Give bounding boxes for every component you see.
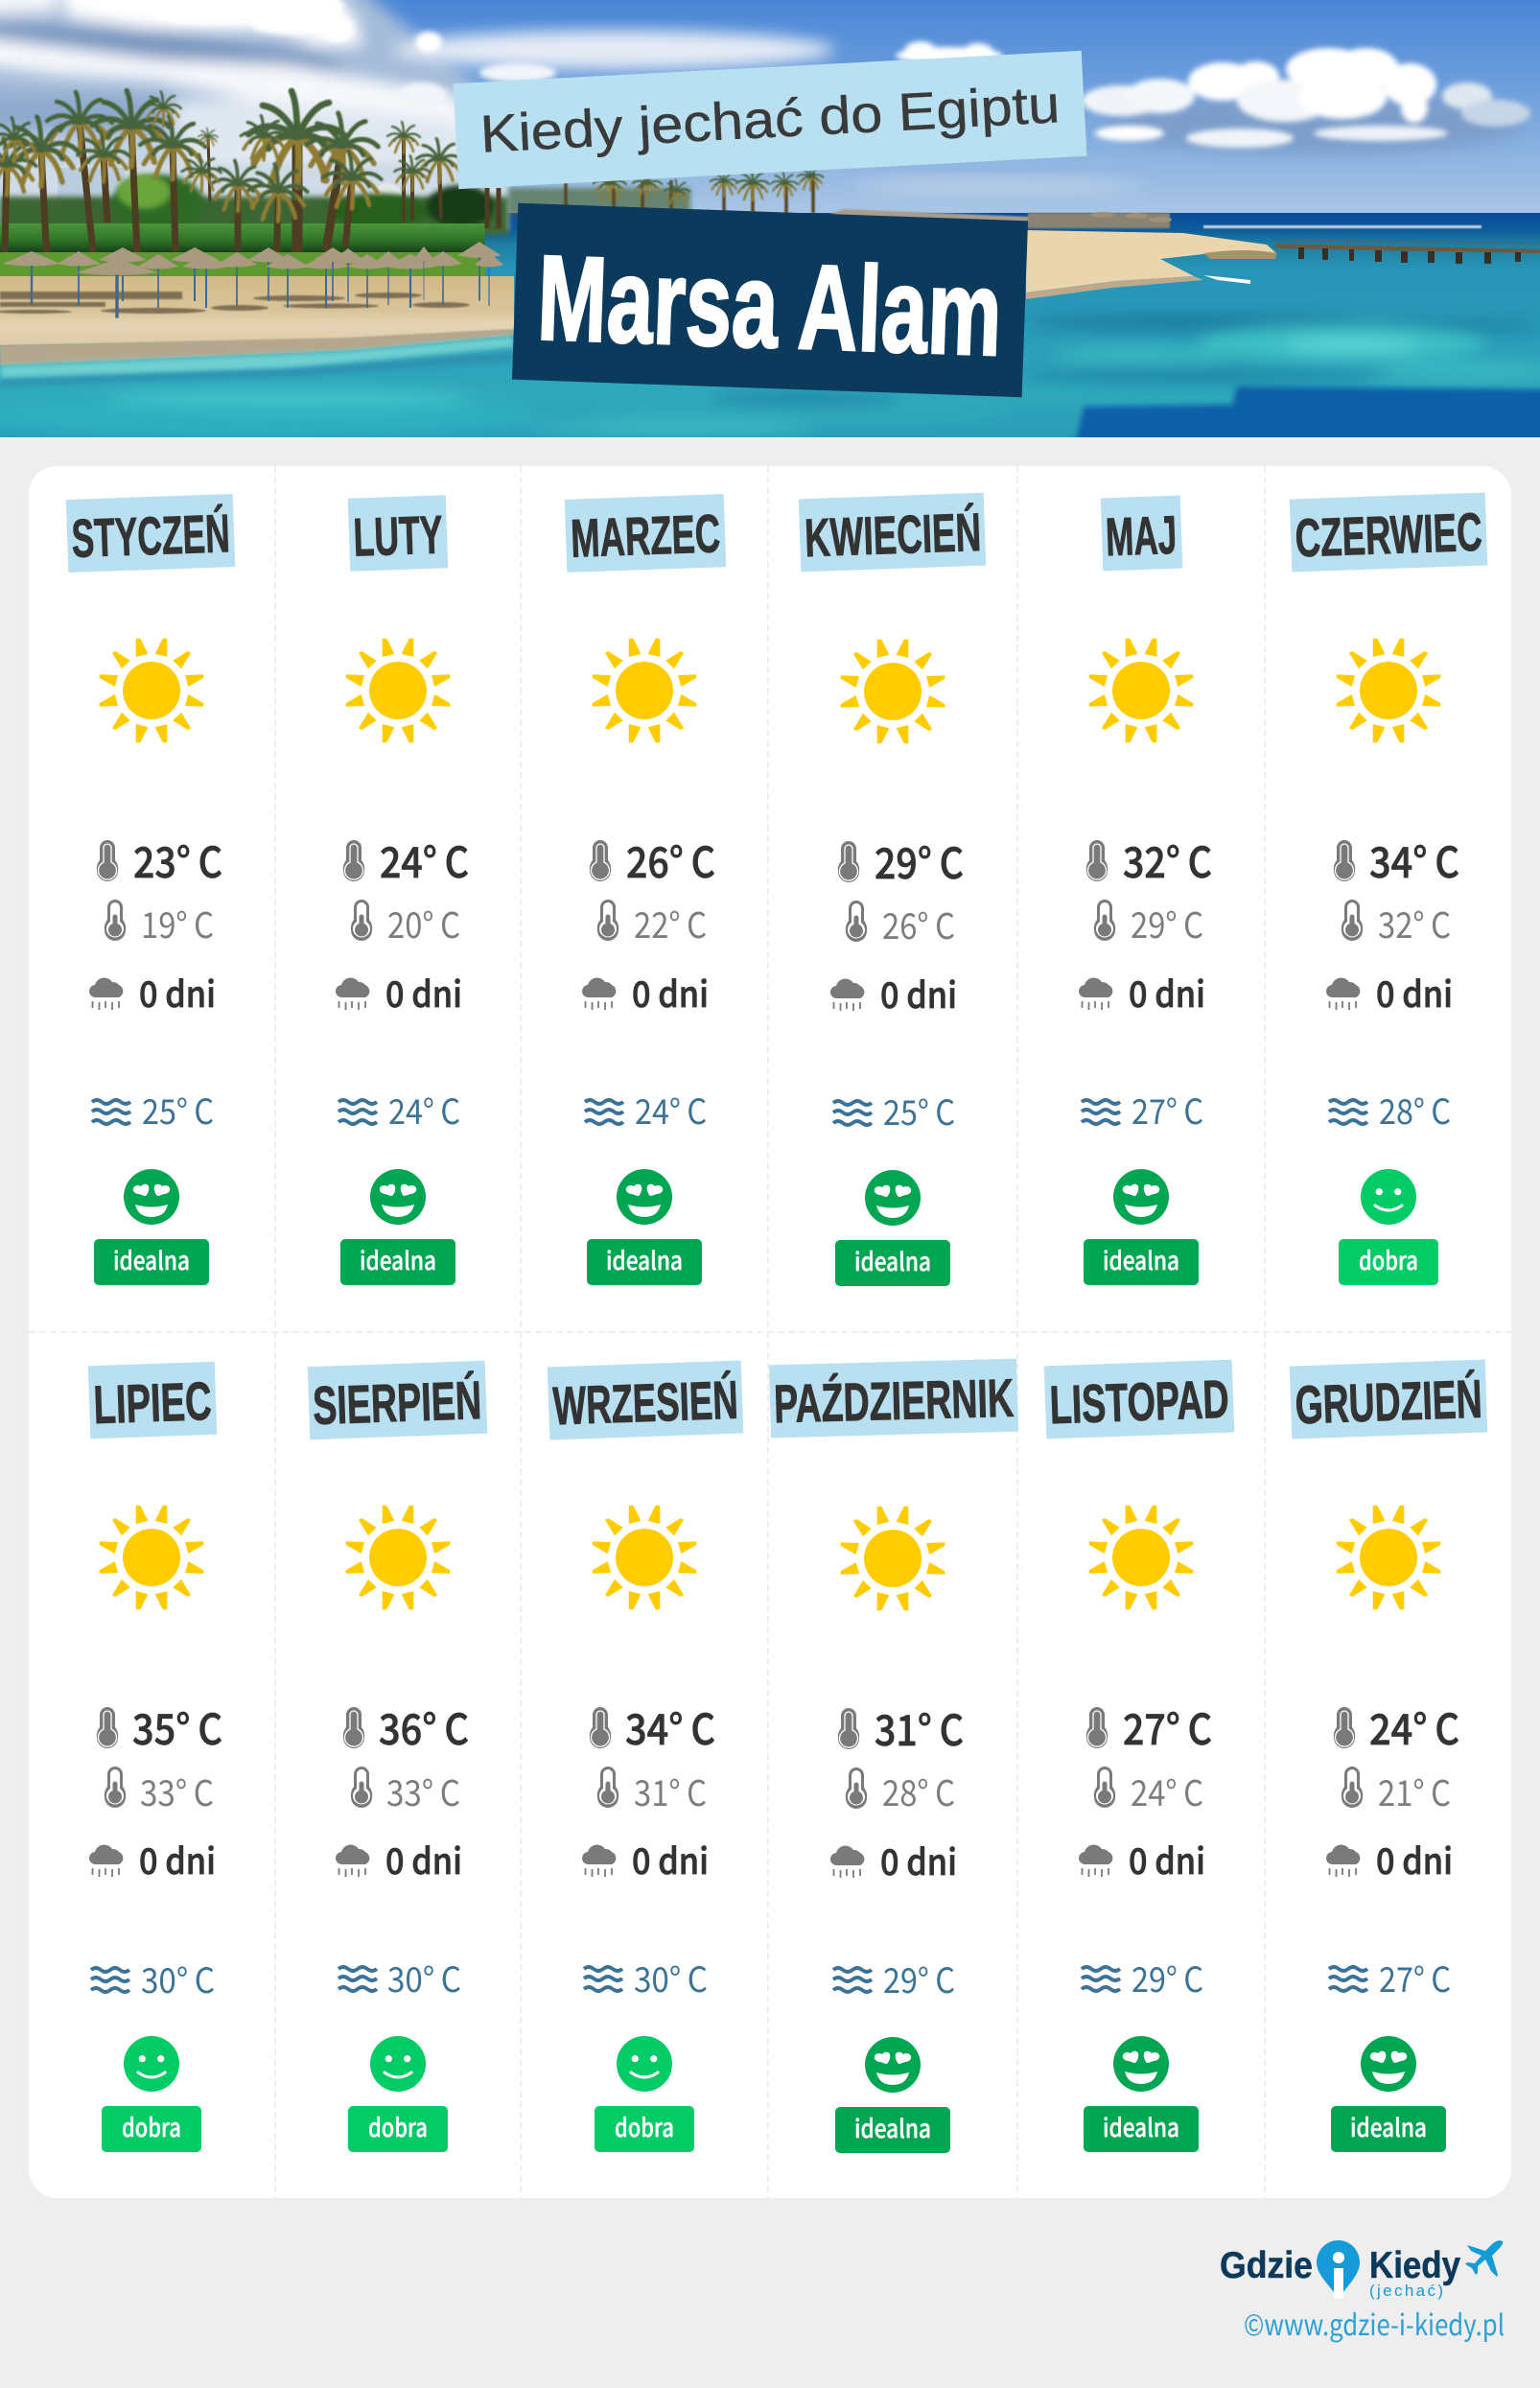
sea temperature: 27° C bbox=[1132, 1085, 1203, 1135]
rating: dobra: dobra bbox=[615, 2109, 674, 2144]
sea temperature: 30° C bbox=[141, 1954, 215, 2003]
rainy days bbox=[336, 966, 462, 1018]
icon: sun bbox=[346, 639, 450, 742]
rating: dobra bbox=[595, 2036, 694, 2152]
sea temperature: 27° C bbox=[1379, 1953, 1451, 2002]
day temperature: 34° C bbox=[1369, 829, 1459, 890]
month: wrzesień bbox=[548, 1360, 743, 2152]
rainy days bbox=[89, 966, 216, 1018]
icon: sun bbox=[346, 1506, 450, 1609]
day temperature bbox=[97, 1696, 222, 1757]
day temperature: 35° C bbox=[132, 1696, 222, 1757]
sea temperature: 29° C bbox=[1132, 1953, 1203, 2002]
website credit: ©www.gdzie-i-kiedy.pl bbox=[1244, 2302, 1505, 2344]
night temperature bbox=[1342, 897, 1451, 948]
day temperature bbox=[97, 829, 222, 890]
month: maj bbox=[1079, 496, 1212, 1285]
rating: dobra bbox=[348, 2036, 448, 2152]
sea temperature bbox=[1082, 1085, 1203, 1135]
photo: distant palms between banners bbox=[508, 165, 1031, 222]
rainy days: 0 dni bbox=[1376, 966, 1453, 1018]
rainy days bbox=[1079, 1833, 1205, 1885]
rating: idealna: idealna bbox=[360, 1242, 436, 1277]
photo: clouds bbox=[0, 0, 1530, 221]
icon: sun bbox=[593, 639, 696, 742]
night temperature: 33° C bbox=[140, 1765, 214, 1816]
heading: WRZESIEŃ bbox=[552, 1370, 739, 1436]
sea temperature: 30° C bbox=[634, 1953, 708, 2002]
sea temperature bbox=[338, 1085, 460, 1135]
sea temperature bbox=[585, 1085, 707, 1135]
rainy days: 0 dni bbox=[1129, 1833, 1205, 1885]
rating: idealna bbox=[1084, 1169, 1199, 1285]
night temperature bbox=[105, 897, 214, 948]
heading bbox=[799, 493, 986, 572]
logo: Gdzie i Kiedy (jechać) bbox=[1220, 2240, 1503, 2300]
heading: MAJ bbox=[1105, 504, 1178, 567]
heading bbox=[1044, 1360, 1234, 1439]
photo: sea shading bbox=[0, 225, 1540, 451]
rainy days bbox=[582, 1833, 709, 1885]
day temperature bbox=[590, 1696, 715, 1757]
rating: idealna: idealna bbox=[1103, 2109, 1179, 2144]
rainy days: 0 dni bbox=[880, 1834, 957, 1885]
sea temperature bbox=[92, 1085, 214, 1135]
rainy days: 0 dni bbox=[385, 1833, 462, 1885]
icon: sun bbox=[841, 640, 945, 743]
rating: dobra bbox=[1339, 1169, 1438, 1285]
icon: sun bbox=[1337, 1506, 1440, 1609]
rating: idealna bbox=[1331, 2036, 1446, 2152]
rainy days bbox=[336, 1833, 462, 1885]
night temperature bbox=[597, 1765, 707, 1816]
icon: map pin with letter i bbox=[1317, 2240, 1360, 2299]
day temperature bbox=[590, 829, 715, 890]
heading bbox=[1290, 1359, 1487, 1440]
sea temperature bbox=[338, 1953, 461, 2002]
heading: LUTY bbox=[353, 503, 444, 568]
rainy days bbox=[1079, 966, 1205, 1018]
icon: sun bbox=[100, 1506, 203, 1609]
icon: sun bbox=[100, 639, 203, 742]
rainy days: 0 dni bbox=[385, 966, 462, 1018]
sea temperature bbox=[833, 1086, 955, 1135]
night temperature: 24° C bbox=[1131, 1765, 1203, 1816]
rating: idealna bbox=[94, 1169, 209, 1285]
icon: sun bbox=[1337, 639, 1440, 742]
icon: sun bbox=[593, 1506, 696, 1609]
logo: Gdzie i Kiedy (jechać): (jechać) bbox=[1369, 2282, 1443, 2300]
heading: PAŹDZIERNIK bbox=[773, 1368, 1015, 1434]
night temperature: 29° C bbox=[1131, 897, 1203, 948]
rating: idealna bbox=[587, 1169, 702, 1285]
month: styczeń bbox=[66, 494, 235, 1285]
night temperature: 28° C bbox=[882, 1765, 955, 1816]
day temperature: 26° C bbox=[626, 829, 715, 890]
rainy days bbox=[582, 966, 709, 1018]
night temperature: 32° C bbox=[1378, 897, 1451, 948]
month: sierpień bbox=[308, 1361, 487, 2152]
heading bbox=[565, 494, 726, 573]
night temperature bbox=[597, 897, 707, 948]
day temperature: 24° C bbox=[380, 829, 469, 890]
month: marzec bbox=[565, 494, 726, 1285]
icon: sun bbox=[841, 1507, 945, 1610]
night temperature bbox=[105, 1765, 214, 1816]
rainy days bbox=[830, 1834, 957, 1885]
rating: idealna: idealna bbox=[1103, 1242, 1179, 1277]
rainy days bbox=[89, 1833, 216, 1885]
photo: foliage bbox=[0, 91, 1540, 451]
day temperature bbox=[343, 829, 469, 890]
rating: dobra: dobra bbox=[122, 2109, 181, 2144]
night temperature: 20° C bbox=[387, 897, 460, 948]
night temperature bbox=[846, 1765, 955, 1816]
month: luty bbox=[336, 495, 469, 1285]
icon: sun bbox=[1089, 639, 1193, 742]
rainy days: 0 dni bbox=[632, 966, 709, 1018]
heading bbox=[308, 1361, 487, 1440]
day temperature bbox=[838, 830, 964, 891]
logo: Gdzie i Kiedy (jechać): Gdzie bbox=[1220, 2245, 1313, 2286]
night temperature: 22° C bbox=[634, 897, 707, 948]
heading bbox=[348, 495, 448, 572]
sea temperature: 25° C bbox=[883, 1086, 955, 1135]
rating: idealna: idealna bbox=[854, 1243, 931, 1278]
icon: sun bbox=[1089, 1506, 1193, 1609]
sea temperature: 24° C bbox=[388, 1085, 460, 1135]
day temperature bbox=[1086, 1696, 1212, 1757]
day temperature: 29° C bbox=[875, 830, 964, 891]
sea temperature: 25° C bbox=[142, 1085, 214, 1135]
night temperature bbox=[1094, 897, 1203, 948]
night temperature: 19° C bbox=[141, 897, 214, 948]
rainy days bbox=[830, 967, 957, 1018]
rainy days: 0 dni bbox=[880, 967, 957, 1018]
day temperature bbox=[838, 1697, 964, 1758]
sea temperature bbox=[91, 1954, 215, 2003]
sea temperature bbox=[584, 1953, 708, 2002]
title banner: Marsa Alam bbox=[512, 203, 1028, 397]
rating: dobra bbox=[102, 2036, 201, 2152]
month: grudzień bbox=[1290, 1359, 1487, 2152]
night temperature bbox=[1342, 1765, 1451, 1816]
night temperature: 26° C bbox=[882, 898, 955, 949]
rating: idealna: idealna bbox=[113, 1242, 190, 1277]
day temperature: 27° C bbox=[1123, 1696, 1212, 1757]
rainy days: 0 dni bbox=[1129, 966, 1205, 1018]
sea temperature: 24° C bbox=[635, 1085, 707, 1135]
rainy days bbox=[1326, 1833, 1453, 1885]
rating: idealna bbox=[1084, 2036, 1199, 2152]
heading bbox=[66, 494, 235, 573]
night temperature: 21° C bbox=[1378, 1765, 1451, 1816]
heading: STYCZEŃ bbox=[71, 503, 231, 569]
heading: LISTOPAD bbox=[1049, 1369, 1230, 1435]
heading bbox=[1101, 496, 1182, 571]
rainy days: 0 dni bbox=[139, 966, 216, 1018]
rainy days: 0 dni bbox=[1376, 1833, 1453, 1885]
rating: idealna: idealna bbox=[1350, 2109, 1427, 2144]
rating: idealna bbox=[835, 1170, 950, 1286]
night temperature bbox=[351, 1765, 460, 1816]
sea temperature bbox=[1329, 1953, 1451, 2002]
day temperature bbox=[343, 1696, 469, 1757]
rating: idealna: idealna bbox=[854, 2110, 931, 2145]
sea temperature bbox=[1082, 1953, 1203, 2002]
heading: LIPIEC bbox=[93, 1370, 213, 1435]
day temperature bbox=[1334, 829, 1459, 890]
day temperature: 31° C bbox=[875, 1697, 964, 1758]
night temperature bbox=[846, 898, 955, 949]
heading bbox=[548, 1360, 743, 1440]
month: czerwiec bbox=[1290, 492, 1487, 1285]
sea temperature: 28° C bbox=[1379, 1085, 1451, 1135]
night temperature: 31° C bbox=[634, 1765, 707, 1816]
rating: dobra: dobra bbox=[368, 2109, 428, 2144]
day temperature: 32° C bbox=[1123, 829, 1212, 890]
day temperature bbox=[1334, 1696, 1459, 1757]
title banner: Kiedy jechać do Egiptu bbox=[454, 51, 1086, 189]
sea temperature bbox=[833, 1954, 955, 2003]
rainy days: 0 dni bbox=[632, 1833, 709, 1885]
day temperature: 24° C bbox=[1369, 1696, 1459, 1757]
icon: airplane bbox=[1465, 2240, 1503, 2277]
sea temperature: 29° C bbox=[883, 1954, 955, 2003]
heading bbox=[769, 1359, 1018, 1438]
month: październik bbox=[769, 1359, 1018, 2153]
night temperature bbox=[1094, 1765, 1203, 1816]
heading bbox=[1290, 492, 1487, 573]
day temperature: 23° C bbox=[133, 829, 222, 890]
panel: monthly climate table bbox=[29, 466, 1511, 2198]
heading: SIERPIEŃ bbox=[312, 1370, 482, 1436]
title banner: Marsa Alam: Marsa Alam bbox=[535, 230, 1004, 381]
month: kwiecień bbox=[799, 493, 986, 1286]
rating: idealna bbox=[340, 1169, 455, 1285]
heading: KWIECIEŃ bbox=[804, 502, 982, 568]
day temperature: 36° C bbox=[379, 1696, 469, 1757]
night temperature bbox=[351, 897, 460, 948]
sea temperature: 30° C bbox=[387, 1953, 461, 2002]
title banner: Kiedy jechać do Egiptu: Kiedy jechać do Egiptu bbox=[478, 74, 1062, 164]
month: lipiec bbox=[88, 1362, 222, 2152]
night temperature: 33° C bbox=[386, 1765, 460, 1816]
rating: idealna: idealna bbox=[606, 1242, 683, 1277]
month: listopad bbox=[1044, 1360, 1234, 2152]
photo: beach bbox=[0, 212, 1277, 365]
logo: Gdzie i Kiedy (jechać): Kiedy bbox=[1369, 2245, 1460, 2286]
rainy days: 0 dni bbox=[139, 1833, 216, 1885]
sea temperature bbox=[1329, 1085, 1451, 1135]
heading: MARZEC bbox=[570, 503, 721, 569]
rainy days bbox=[1326, 966, 1453, 1018]
day temperature bbox=[1086, 829, 1212, 890]
rating: dobra: dobra bbox=[1359, 1242, 1418, 1277]
rating: idealna bbox=[835, 2037, 950, 2153]
day temperature: 34° C bbox=[625, 1696, 715, 1757]
heading bbox=[88, 1362, 217, 1439]
